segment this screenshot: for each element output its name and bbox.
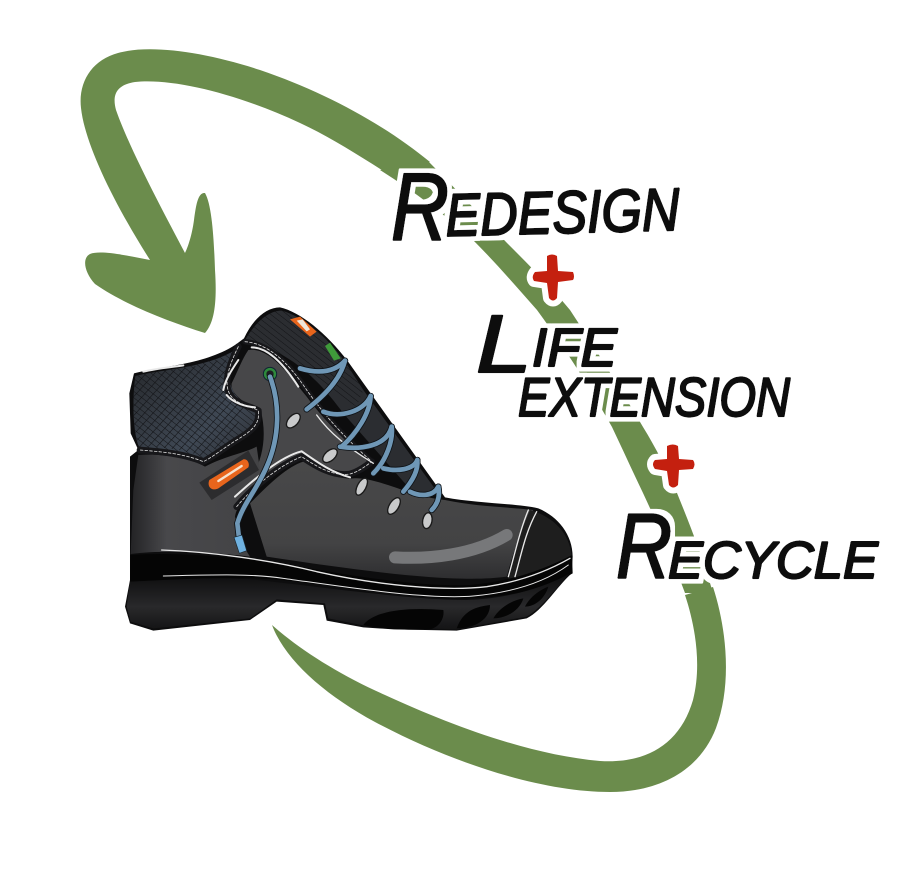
sole and seam highlights xyxy=(143,347,570,597)
seam bands with stitching xyxy=(140,342,372,507)
heel panel xyxy=(131,447,260,557)
toe cap xyxy=(508,510,572,580)
tongue hatch xyxy=(245,311,363,407)
label: Recycle xyxy=(616,496,879,598)
label: Life extension: IFE xyxy=(532,318,618,378)
eyelet hole xyxy=(266,370,274,378)
plus sign 1 xyxy=(533,254,574,300)
label: Recycle: R xyxy=(616,496,672,598)
label: Recycle: ECYCLE xyxy=(668,532,879,590)
illustration: hiking boot xyxy=(125,307,573,631)
laces xyxy=(237,361,439,547)
tongue padding xyxy=(245,311,438,497)
boot silhouette xyxy=(125,307,573,631)
lace aglet xyxy=(234,535,247,553)
label: Redesign: EDESIGN xyxy=(445,176,681,249)
cycle arrow: top arc with arrowhead xyxy=(81,49,430,333)
eyelet green xyxy=(263,367,277,381)
plus sign 2 xyxy=(653,444,694,488)
tongue green tab xyxy=(325,343,341,361)
cycle arrow: middle band behind text xyxy=(380,160,713,593)
cycle arrow: bottom arc xyxy=(272,587,726,792)
outsole lugs xyxy=(363,587,548,630)
collar hatch 1 xyxy=(133,349,257,462)
collar hatch 2 xyxy=(133,357,243,457)
upper side panel xyxy=(232,350,373,497)
tongue orange tab xyxy=(290,317,317,337)
label: Life extension: EXTENSION xyxy=(518,366,790,428)
vamp panel xyxy=(250,462,533,579)
tongue orange tab highlight xyxy=(297,319,310,331)
ankle orange patch xyxy=(199,451,259,500)
label: Life extension: L xyxy=(476,299,532,390)
quarter collar quilting xyxy=(133,349,257,462)
label: Redesign xyxy=(391,154,681,261)
label: Redesign: R xyxy=(391,154,449,261)
label: Life extension xyxy=(476,299,790,428)
midsole stripe xyxy=(130,554,573,598)
toe highlight xyxy=(395,535,507,558)
outsole xyxy=(127,573,570,629)
eyelet hooks xyxy=(284,411,433,529)
